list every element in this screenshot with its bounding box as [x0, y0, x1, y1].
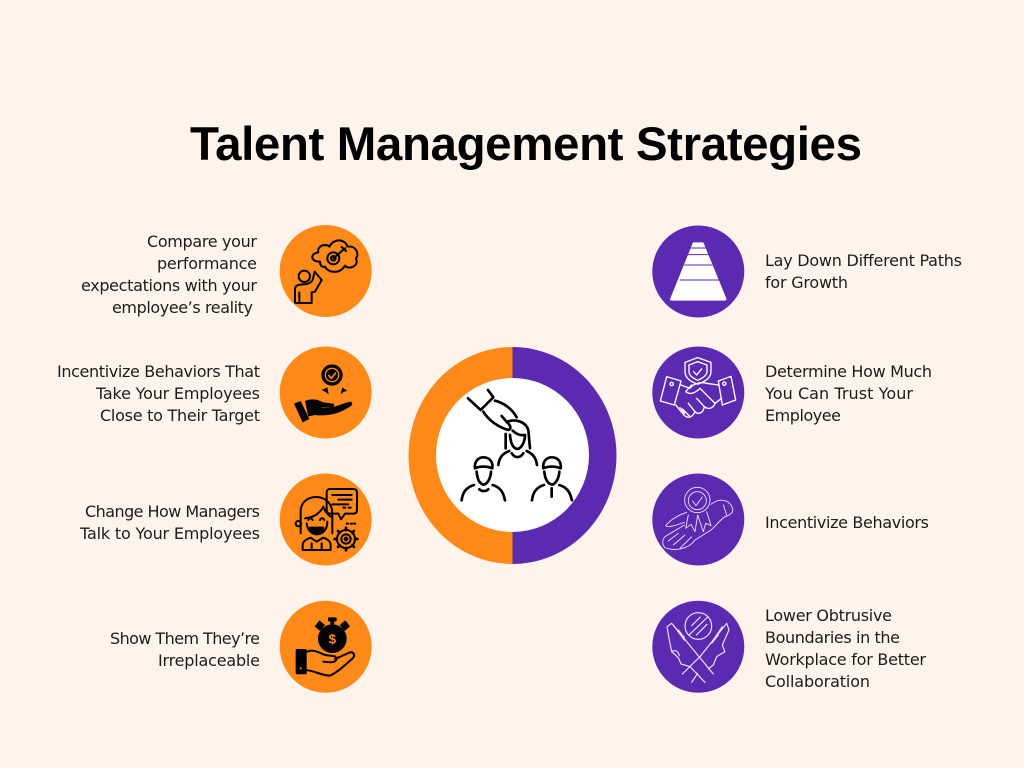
- panel: right item 3: [652, 474, 929, 566]
- text: incentivize behaviors target: [57, 362, 260, 425]
- text: change how managers talk: Change How Managers: [85, 502, 260, 521]
- text: compare expectations: expectations with your: [81, 276, 257, 295]
- text: show them irreplaceable: Show Them They’re: [110, 629, 260, 648]
- icon: hand holding stopwatch: $: [329, 632, 337, 647]
- icon: hand with medal: [280, 346, 372, 438]
- text: show them irreplaceable: [110, 629, 260, 670]
- icon: manager hand selecting employees: [462, 390, 572, 500]
- panel: right item 2: [652, 346, 932, 438]
- text: incentivize behaviors target: Incentivize Behaviors That: [57, 362, 260, 381]
- text: compare expectations: [81, 232, 257, 317]
- text: show them irreplaceable: Irreplaceable: [158, 651, 260, 670]
- panel: right item 1: [652, 226, 962, 318]
- text: determine trust: Employee: [765, 406, 841, 425]
- text: compare expectations: employee’s reality: [112, 298, 253, 317]
- text: determine trust: You Can Trust Your: [764, 384, 913, 403]
- text: compare expectations: performance: [157, 254, 257, 273]
- text: change how managers talk: [79, 502, 260, 543]
- text: lay down paths: Lay Down Different Paths: [765, 251, 962, 270]
- text: lower obtrusive boundaries: Collaboration: [765, 672, 870, 691]
- panel: left item 2: [57, 346, 372, 438]
- text: incentivize behaviors: Incentivize Behaviors: [765, 513, 929, 532]
- text: incentivize behaviors target: Close to Their Target: [100, 406, 260, 425]
- text: change how managers talk: Talk to Your Employees: [79, 524, 260, 543]
- icon: person thinking of target: [280, 225, 372, 317]
- text: determine trust: [764, 362, 932, 425]
- central donut: [408, 347, 616, 564]
- text: incentivize behaviors target: Take Your Employees: [95, 384, 260, 403]
- panel: right item 4: [652, 601, 926, 693]
- icon: crossed hands with no sign: [652, 601, 744, 693]
- icon: pyramid of growth paths: [652, 226, 744, 318]
- icon: hand holding stopwatch: [280, 601, 372, 693]
- text: lay down paths: for Growth: [765, 273, 848, 292]
- icon: handshake with shield: [652, 346, 744, 438]
- icon: support agent with speech bubble and gear: [280, 474, 372, 566]
- text: lay down paths: [765, 251, 962, 292]
- text: lower obtrusive boundaries: Boundaries in the: [765, 628, 900, 647]
- panel: left item 1: [81, 225, 372, 317]
- title: Talent Management Strategies: [190, 118, 862, 171]
- text: lower obtrusive boundaries: Workplace for Better: [765, 650, 926, 669]
- panel: left item 3: [79, 474, 372, 566]
- text: compare expectations: Compare your: [147, 232, 257, 251]
- text: lower obtrusive boundaries: [765, 606, 926, 691]
- icon: open hand with award rosette: [652, 474, 744, 566]
- panel: left item 4: [110, 601, 372, 693]
- text: determine trust: Determine How Much: [765, 362, 932, 381]
- text: lower obtrusive boundaries: Lower Obtrusive: [765, 606, 892, 625]
